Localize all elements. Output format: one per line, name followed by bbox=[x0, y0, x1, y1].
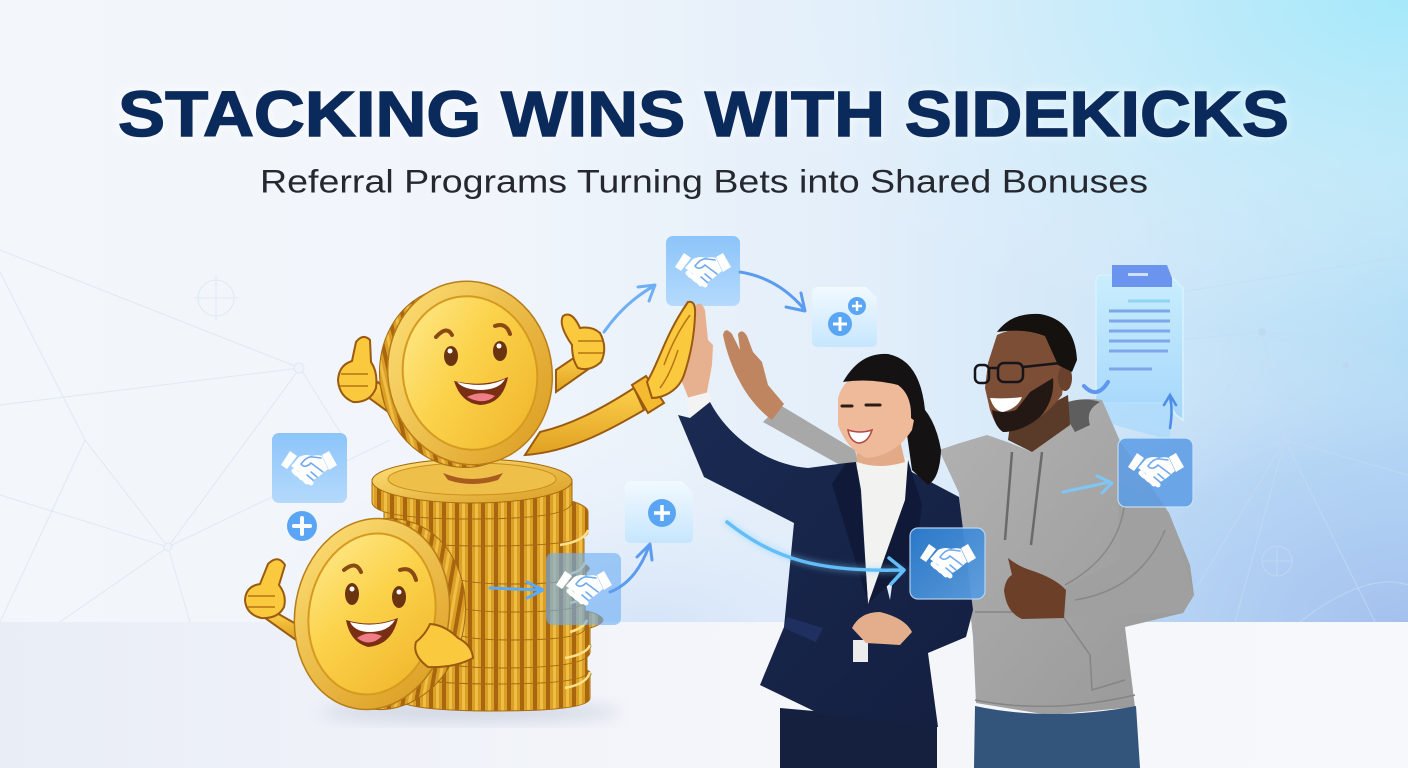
stack layer highlights bbox=[560, 530, 590, 688]
document bbox=[1084, 265, 1183, 440]
icon: double plus tile bbox=[812, 287, 877, 347]
coin stack bbox=[320, 459, 620, 722]
shirt below hand bbox=[853, 640, 868, 662]
raised hand bbox=[723, 330, 784, 420]
eyes bbox=[842, 405, 880, 406]
hair bbox=[843, 354, 925, 425]
jacket bbox=[678, 402, 973, 727]
arrow: coin to top tile bbox=[604, 285, 655, 332]
stack layers bbox=[372, 459, 603, 711]
pants bbox=[780, 708, 937, 768]
ear bbox=[1058, 365, 1072, 391]
coin body bbox=[362, 270, 560, 484]
woman bbox=[678, 303, 973, 768]
raised arm sleeve bbox=[763, 405, 860, 470]
icon: handshake tile woman bbox=[910, 528, 985, 599]
hoodie body bbox=[939, 399, 1194, 715]
title: STACKING WINS WITH SIDEKICKS bbox=[118, 78, 1289, 150]
icon: plus circle left bbox=[287, 511, 317, 541]
man bbox=[723, 314, 1194, 768]
icon: handshake tile left bbox=[272, 433, 347, 503]
network lines right bbox=[1180, 256, 1408, 622]
face bbox=[436, 325, 510, 405]
ponytail bbox=[905, 400, 941, 485]
arrow: top tile to plus tile bbox=[740, 272, 805, 311]
lower coin character bbox=[245, 506, 480, 722]
right hand bbox=[415, 624, 473, 667]
coin high-five hand bbox=[647, 302, 695, 398]
lower coin face bbox=[344, 565, 416, 647]
right arm and thumbs up bbox=[525, 314, 664, 455]
glasses bbox=[975, 363, 1060, 383]
stack coin smile bbox=[443, 473, 503, 484]
subtitle: Referral Programs Turning Bets into Shared Bonuses bbox=[260, 164, 1148, 200]
floor bbox=[0, 622, 1408, 768]
pocket bbox=[975, 612, 1135, 706]
lapels bbox=[832, 460, 922, 604]
thumbs up hand bbox=[1004, 558, 1066, 619]
hair bbox=[997, 314, 1077, 372]
face bbox=[838, 370, 917, 458]
smile bbox=[990, 397, 1022, 412]
icon: handshake tile man bbox=[1118, 438, 1193, 507]
left arm and thumbs up bbox=[338, 337, 402, 422]
raised hand bbox=[682, 303, 713, 402]
turtleneck and shirt bbox=[856, 457, 908, 604]
icon: handshake tile top bbox=[666, 236, 740, 306]
drawstrings bbox=[1005, 452, 1042, 545]
arrow: into man tile bbox=[1063, 476, 1112, 493]
hand at waist bbox=[852, 612, 912, 645]
hood shadow bbox=[1068, 400, 1100, 432]
shirt cuff bbox=[686, 392, 712, 420]
title: STACKING WINS WITH SIDEKICKS bbox=[118, 78, 1289, 150]
sleeve fold bbox=[1064, 480, 1194, 617]
mouth bbox=[848, 430, 872, 443]
face bbox=[985, 328, 1066, 432]
left thumbs up bbox=[245, 559, 298, 640]
pocket flap bbox=[784, 617, 823, 642]
icon: handshake tile on stack bbox=[546, 553, 621, 625]
neck bbox=[1008, 395, 1070, 452]
arrow: curved glowing to tile bbox=[727, 522, 904, 584]
neck bbox=[856, 440, 905, 466]
arrow: stack tile to plus tile bbox=[610, 544, 652, 592]
network lines left bbox=[0, 250, 390, 622]
icon: plus tile lower bbox=[625, 481, 693, 543]
top coin character bbox=[338, 268, 664, 484]
arrow: into stack tile bbox=[490, 582, 543, 598]
jeans bbox=[974, 706, 1140, 768]
beard bbox=[992, 378, 1053, 432]
